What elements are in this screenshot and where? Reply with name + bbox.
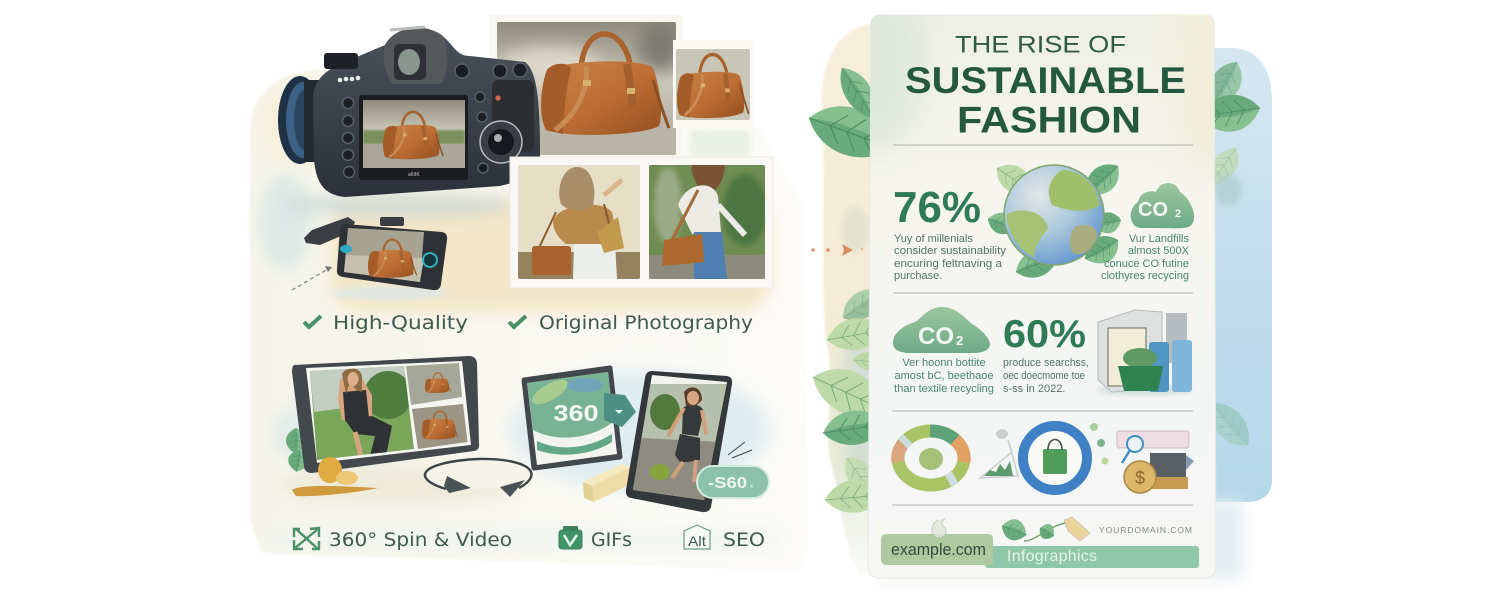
heading [905, 32, 1186, 140]
camera screen: a6IIK [408, 172, 420, 178]
lens [278, 76, 322, 164]
stat: CO2 text: amost bC, beethaoe [894, 370, 994, 382]
panel: sustainable fashion card [868, 14, 1216, 578]
device: 360 viewer [520, 368, 636, 468]
stat: 76%: 76% [893, 183, 981, 232]
footer label: yourdomain: YOURDOMAIN.COM [1099, 525, 1192, 535]
icon: CO2 cloud large: CO [918, 323, 954, 350]
stat: 60%: produce searchss, [1003, 357, 1089, 369]
footer bar: infographics: Infographics [1007, 548, 1097, 565]
camera screen [359, 95, 468, 180]
leaves: left of card [801, 61, 902, 515]
heading: FASHION [957, 100, 1141, 140]
stat: CO2 text [894, 357, 994, 395]
chart: donut [898, 431, 964, 485]
feature: SEO: SEO [723, 530, 765, 551]
stat: landfills text: conuce CO futine [1104, 258, 1189, 270]
stat: 76%: consider sustainability [894, 245, 1007, 257]
feature: 360 spin and video: 360° Spin & Video [329, 530, 512, 551]
arrow: rotate [425, 459, 531, 497]
icon: card, magnifier, coin and monitor [1117, 431, 1194, 493]
feature: Original Photography: Original Photography [539, 312, 753, 334]
icon: blue ring with bag [1023, 423, 1108, 490]
icon: CO2 cloud: 2 [1175, 208, 1181, 220]
stat: 60%: oec doecmome toe [1003, 370, 1085, 382]
infographic canvas [250, 14, 1272, 584]
feature: High-Quality: High-Quality [333, 312, 468, 334]
stat: landfills text [1101, 233, 1190, 282]
photo: large bag [489, 15, 683, 157]
price badge [697, 466, 769, 498]
stat: landfills text: Vur Landfills [1129, 233, 1189, 245]
stat: CO2 text: than textile recycling [894, 383, 994, 395]
feature: GIFs: GIFs [591, 530, 632, 551]
icon: CO2 cloud: CO [1138, 199, 1168, 221]
icon: CO2 cloud large [893, 307, 990, 353]
panel: left watercolor background [250, 70, 808, 572]
camera shadow [285, 193, 515, 217]
chart: rising bars on hanger [980, 429, 1018, 478]
icon: globe with leaves [985, 157, 1127, 284]
footer box: example.com: example.com [891, 540, 986, 559]
stat: landfills text: clothyres recycing [1101, 270, 1189, 282]
heading: THE RISE OF [955, 32, 1126, 58]
icon: alt tag: Alt [688, 533, 706, 549]
panel: right watercolor background [822, 22, 1272, 586]
tablet with leaf and coins [286, 356, 479, 496]
stat: 60%: 60% [1003, 313, 1086, 356]
camera [278, 27, 540, 197]
stat: landfills text: almost 500X [1128, 245, 1190, 257]
price badge: -S60 [708, 475, 747, 492]
icon: CO2 cloud large: 2 [956, 333, 963, 348]
feature: GIFs [559, 526, 632, 551]
photo pair: woman with bag [510, 157, 773, 288]
heading: SUSTAINABLE [905, 60, 1186, 101]
stat: 76%: purchase. [894, 270, 942, 282]
feature: SEO [684, 525, 765, 551]
label: 360: 360 [554, 400, 598, 426]
dashed arrow to phone [292, 266, 332, 290]
footer bar: infographics [985, 546, 1199, 568]
photo: woman from behind [518, 165, 640, 279]
icon: card, magnifier, coin and monitor: $ [1135, 468, 1145, 488]
photo: small bag [673, 40, 753, 128]
footer box: example.com [881, 519, 993, 565]
stat: 76%: Yuy of millenials [894, 233, 973, 245]
leaves: right of card [1196, 55, 1263, 455]
icon: CO2 cloud [1131, 183, 1194, 228]
small phone with clicker [304, 217, 448, 300]
phone with runner [626, 371, 752, 512]
photo: woman walking [649, 165, 767, 279]
camera body [313, 28, 540, 197]
stat: 76% [893, 183, 1007, 282]
icon: expand arrows [294, 528, 319, 549]
stat: 76%: encuring feltnaving a [894, 258, 1003, 270]
footer twig with leaves [999, 516, 1090, 544]
stat: 60%: s-ss in 2022. [1003, 383, 1065, 395]
stat: 60% [1003, 313, 1089, 395]
camera dial [480, 121, 522, 163]
wooden block [583, 464, 631, 502]
icon: GIF badge [559, 526, 582, 549]
stat: CO2 text: Ver hoonn bottite [902, 357, 986, 369]
icon: appliances and basket [1097, 310, 1193, 395]
dotted arrow between panels [811, 244, 863, 256]
price badge: x [750, 484, 753, 490]
